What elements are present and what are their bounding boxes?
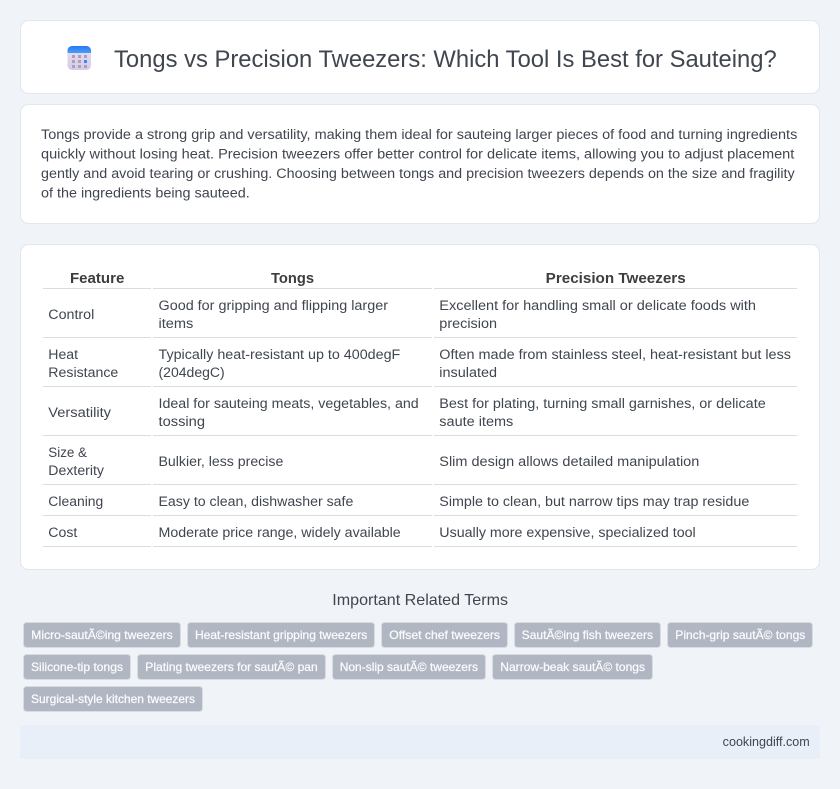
chip (24, 622, 180, 648)
row: control: items (158, 316, 193, 332)
chip (492, 654, 652, 680)
chip: Silicone-tip tongs (31, 660, 123, 674)
row: size and dexterity (48, 445, 699, 479)
row: cost: Cost (48, 525, 77, 541)
intro text: of the ingredients being sauteed. (41, 186, 250, 202)
row: cost: Moderate price range, widely available (158, 525, 401, 541)
row: control: Control (48, 307, 94, 323)
row: versatility: Best for plating, turning small garnishes, or delicate (439, 396, 766, 412)
row: heat resistance: Typically heat-resistant up to 400degF (158, 347, 401, 363)
chip (382, 622, 508, 648)
footer (20, 725, 820, 759)
table header: Precision Tweezers (546, 271, 686, 287)
intro text (41, 127, 797, 202)
chip (138, 654, 326, 680)
row: cost (48, 525, 696, 541)
row: versatility: tossing (158, 414, 205, 430)
row: heat resistance: Heat (48, 347, 78, 363)
chip (24, 654, 130, 680)
row: cost: Usually more expensive, specialized tool (439, 525, 696, 541)
table header: Feature (70, 271, 124, 287)
row: versatility: saute items (439, 414, 513, 430)
chip: Offset chef tweezers (389, 628, 500, 642)
row: control (48, 298, 756, 332)
row: versatility (48, 396, 766, 430)
table header: Tongs (271, 271, 314, 287)
chip (188, 622, 374, 648)
heading: important related terms: Important Related Terms (332, 592, 508, 609)
chip: Surgical-style kitchen tweezers (31, 692, 195, 706)
chip (24, 686, 202, 712)
icon: calendar (68, 46, 91, 70)
intro text: Tongs provide a strong grip and versatility, making them ideal for sauteing larger pieces of food and turning ingredients (41, 127, 797, 143)
chip: Narrow-beak sautÃ© tongs (500, 660, 645, 674)
row: size and dexterity: Size & (48, 445, 87, 461)
row: cleaning: Easy to clean, dishwasher safe (158, 494, 353, 510)
footer source: cookingdiff.com (723, 735, 810, 749)
related terms section (24, 592, 812, 712)
chip: Plating tweezers for sautÃ© pan (145, 660, 318, 674)
chip: Non-slip sautÃ© tweezers (340, 660, 478, 674)
row: size and dexterity: Bulkier, less precise (158, 454, 283, 470)
chip (668, 622, 812, 648)
title: Tongs vs Precision Tweezers: Which Tool Is Best for Sauteing? (114, 46, 777, 73)
row: versatility: Ideal for sauteing meats, vegetables, and (158, 396, 419, 412)
chip: Pinch-grip sautÃ© tongs (675, 628, 805, 642)
row: control: precision (439, 316, 497, 332)
row: size and dexterity: Slim design allows detailed manipulation (439, 454, 699, 470)
table header (70, 271, 686, 287)
chip: SautÃ©ing fish tweezers (522, 628, 653, 642)
row: heat resistance: Often made from stainless steel, heat-resistant but less (439, 347, 791, 363)
intro text: gently and avoid tearing or crushing. Choosing between tongs and precision tweezers depends on the size and fragility (41, 166, 796, 182)
chip: Heat-resistant gripping tweezers (195, 628, 367, 642)
row: heat resistance: Resistance (48, 365, 118, 381)
chip (332, 654, 486, 680)
row: control: Good for gripping and flipping larger (158, 298, 388, 314)
panel: introduction (20, 104, 820, 224)
panel: comparison table (20, 244, 820, 570)
chip (514, 622, 660, 648)
row: heat resistance (48, 347, 791, 381)
row: cleaning (48, 494, 749, 510)
row: control: Excellent for handling small or delicate foods with (439, 298, 756, 314)
row: size and dexterity: Dexterity (48, 463, 105, 479)
row: heat resistance: insulated (439, 365, 497, 381)
intro text: quickly without losing heat. Precision tweezers offer better control for delicate items, allowing you to adjust placement (41, 146, 794, 162)
row: versatility: Versatility (48, 405, 112, 421)
row: cleaning: Simple to clean, but narrow tips may trap residue (439, 494, 749, 510)
chip: Micro-sautÃ©ing tweezers (31, 628, 173, 642)
row: heat resistance: (204degC) (158, 365, 225, 381)
panel: header (20, 20, 820, 94)
row: cleaning: Cleaning (48, 494, 103, 510)
